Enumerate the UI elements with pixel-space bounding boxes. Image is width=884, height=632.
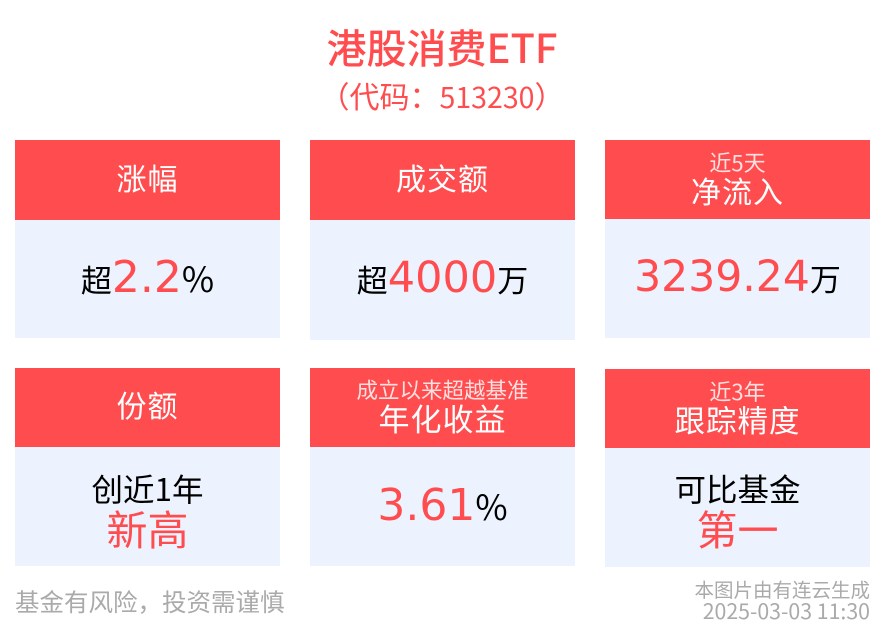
heading: 涨幅: 涨幅 (116, 155, 178, 199)
value: 创近1年新高: 创近1年 (92, 465, 203, 511)
value: 创近1年新高: 新高 (106, 497, 188, 557)
value: 可比基金第一: 可比基金 (674, 465, 800, 511)
panel: 成立以来超越基准年化收益 (310, 368, 575, 566)
value: 超4000万: 超4000万 (357, 253, 528, 303)
panel: 份额 (15, 368, 280, 566)
subtitle: fund code: （代码：513230） (320, 73, 564, 117)
value: 可比基金第一 (674, 465, 800, 557)
heading: 跟踪精度: 跟踪精度 (674, 397, 800, 441)
heading: 年化收益 (310, 368, 575, 447)
value: 可比基金第一: 第一 (696, 497, 778, 557)
panel: 近3年跟踪精度 (605, 369, 870, 567)
risk disclaimer: 基金有风险，投资需谨慎 (15, 584, 284, 619)
panel: 近5天净流入 (605, 140, 870, 338)
panel: 成交额 (310, 140, 575, 340)
source and timestamp: 本图片由有连云生成 (694, 574, 870, 603)
panel: 涨幅 (15, 140, 280, 338)
heading: 近5天净流入: 净流入 (691, 168, 784, 212)
source and timestamp (694, 574, 870, 626)
title: 港股消费ETF (326, 17, 558, 75)
heading: 年化收益: 年化收益 (378, 395, 506, 440)
value: 创近1年新高 (92, 465, 203, 557)
heading: 近5天净流入 (605, 140, 870, 219)
heading: 涨幅 (15, 140, 280, 220)
heading: 份额: 份额 (116, 382, 178, 426)
heading: 份额 (15, 368, 280, 447)
heading: 跟踪精度 (605, 369, 870, 448)
heading: 年化收益: 成立以来超越基准 (356, 374, 528, 405)
heading: 成交额: 成交额 (396, 155, 489, 199)
value: 3239.24万: 3239.24万 (634, 253, 841, 302)
heading: 跟踪精度: 近3年 (709, 375, 766, 407)
heading: 成交额 (310, 140, 575, 220)
value: 3.61%: 3.61% (377, 480, 508, 531)
heading: 近5天净流入: 近5天 (709, 146, 766, 178)
source and timestamp: 2025-03-03 11:30 (703, 595, 870, 626)
value: 超2.2%: 超2.2% (81, 252, 214, 303)
